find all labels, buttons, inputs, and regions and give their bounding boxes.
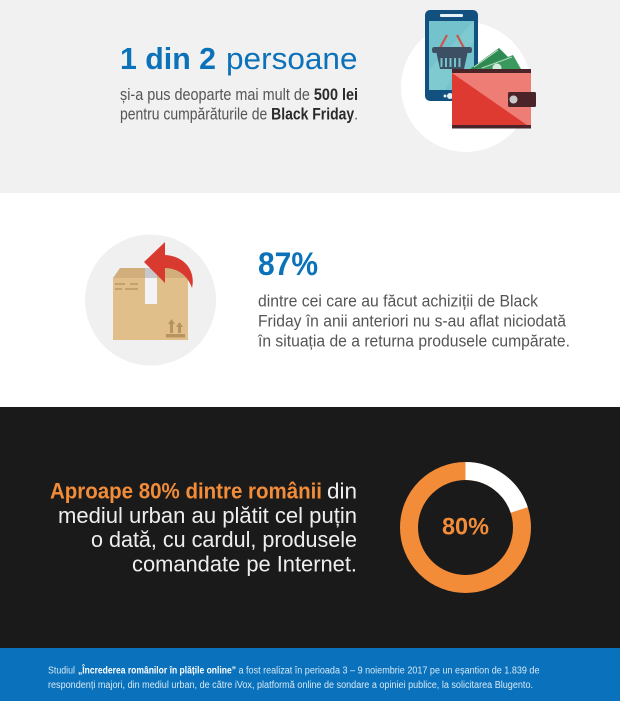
text block: returns description	[257, 292, 570, 350]
donut label: 80%	[442, 514, 489, 540]
text block: returns description: Friday în anii anteriori nu s-au aflat niciodată	[258, 312, 567, 330]
text block: returns description: în situația de a returna produsele cumpărate.	[257, 332, 570, 350]
text block: card payments statement: o dată, cu cardul, produsele	[91, 527, 357, 552]
text block: footnote	[48, 664, 540, 691]
text block: card payments statement: mediul urban au plătit cel puțin	[58, 503, 357, 528]
text block: card payments statement: Aproape 80% dintre românii	[50, 478, 322, 504]
text block: card payments statement: din	[327, 478, 357, 504]
text block: footnote: respondenți majori, din mediul urban, de către iVox, platformă online de sondare a opiniei publice, la solicitarea Blugento.	[48, 680, 533, 691]
text block: footnote: „Încrederea românilor în plățile online”	[78, 664, 236, 676]
heading: 1 din 2 persoane: persoane	[226, 41, 358, 76]
icon: parcel with return arrow	[85, 234, 216, 366]
text block: savings description	[120, 86, 358, 124]
text block: returns description: dintre cei care au făcut achiziții de Black	[258, 292, 539, 310]
heading: 1 din 2 persoane: 1 din 2	[120, 41, 216, 76]
panel: card payments	[0, 407, 620, 648]
chart: 80% donut	[409, 471, 522, 584]
text block: footnote: a fost realizat în perioada 3 – 9 noiembrie 2017 pe un eșantion de 1.839 de	[238, 666, 540, 676]
text block: footnote: Studiul	[48, 666, 75, 676]
panel: returns	[0, 193, 620, 407]
icon: phone and wallet	[401, 10, 536, 152]
text block: card payments statement: comandate pe Internet.	[132, 552, 357, 576]
text block: savings description: și-a pus deoparte mai mult de 500 lei	[120, 86, 358, 104]
panel: study footnote	[0, 648, 620, 701]
stat: 87%: 87%	[258, 246, 318, 282]
text block: savings description: pentru cumpărăturile de Black Friday.	[120, 106, 358, 124]
panel: savings	[0, 0, 620, 193]
text block: card payments statement	[50, 478, 357, 576]
heading: 1 din 2 persoane	[120, 41, 358, 76]
